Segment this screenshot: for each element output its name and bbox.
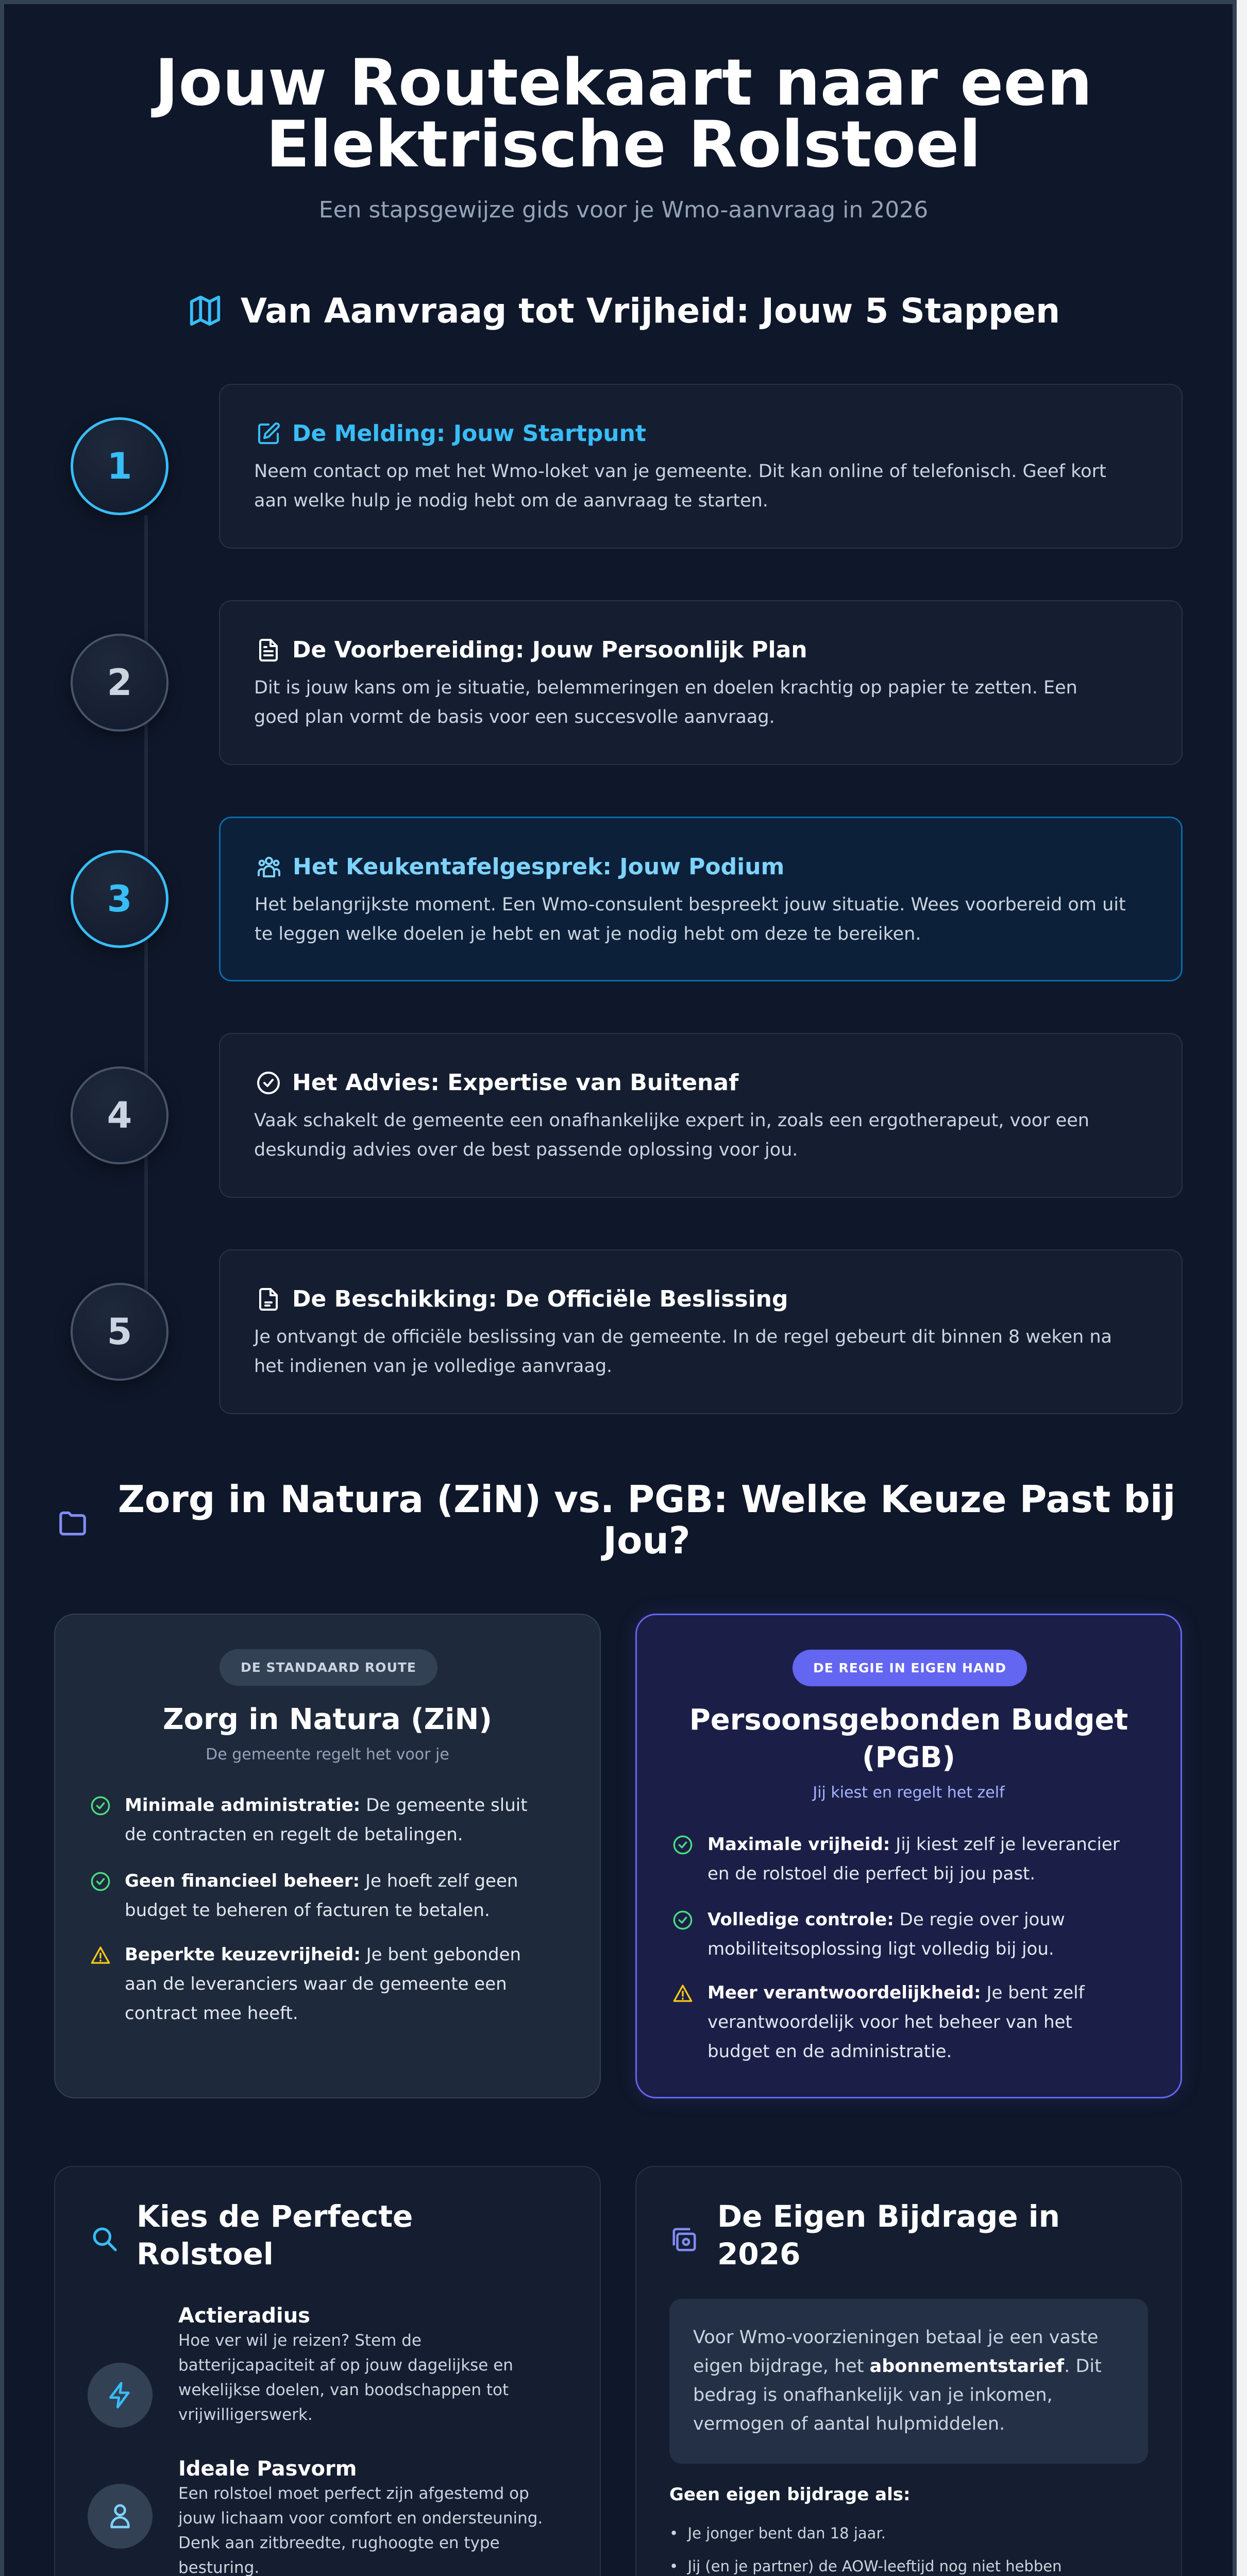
step 5 text: Je ontvangt de officiële beslissing van de gemeente. In de regel gebeurt dit binnen 8 weken na — [254, 1327, 1112, 1347]
panel: ZiN: de contracten en regelt de betalingen. — [125, 1824, 463, 1845]
panel: PGB — [635, 1614, 1182, 2098]
pill: standaard route — [220, 1649, 437, 1686]
title — [151, 46, 1092, 182]
ZiN title: Zorg in Natura (ZiN) — [163, 1703, 492, 1736]
feature: pasvorm — [88, 2457, 543, 2576]
pill: regie in eigen hand: DE REGIE IN EIGEN HAND — [813, 1660, 1006, 1675]
heading: 5 stappen: Van Aanvraag tot Vrijheid: Jouw 5 Stappen — [241, 291, 1060, 331]
step 4 text: deskundig advies over de best passende oplossing voor jou. — [254, 1140, 798, 1160]
panel: ZiN: Geen financieel beheer: Je hoeft zelf geen — [125, 1871, 518, 1891]
step 4 circle — [71, 1066, 168, 1164]
info box: bedrag is onafhankelijk van je inkomen, — [693, 2385, 1053, 2405]
list: conditions: • Je jonger bent dan 18 jaar. — [669, 2524, 886, 2542]
step 4 circle: 4 — [107, 1094, 132, 1137]
heading: eigen bijdrage — [717, 2199, 1060, 2272]
step 4 card — [219, 1033, 1183, 1198]
step 1 text: aan welke hulp je nodig hebt om de aanvraag te starten. — [254, 490, 768, 511]
feature: pasvorm: Ideale Pasvorm — [178, 2457, 357, 2481]
panel: PGB: en de rolstoel die perfect bij jou past. — [707, 1863, 1035, 1884]
PGB title — [689, 1703, 1128, 1774]
list: conditions — [669, 2524, 1061, 2575]
panel: ZiN: aan de leveranciers waar de gemeente een — [125, 1974, 507, 1994]
title: Elektrische Rolstoel — [266, 108, 981, 182]
step 2 text — [254, 677, 1077, 727]
ZiN subtitle: De gemeente regelt het voor je — [206, 1745, 449, 1764]
step 2 card — [219, 600, 1183, 765]
PGB bullet 3 — [673, 1982, 1085, 2062]
icon: folder — [59, 1512, 86, 1535]
feature: actieradius: wekelijkse doelen, van boodschappen tot — [178, 2381, 509, 2399]
step 2 title: De Voorbereiding: Jouw Persoonlijk Plan — [292, 637, 807, 663]
step 3 card — [219, 817, 1183, 981]
panel: PGB: verantwoordelijk voor het beheer van het — [707, 2012, 1072, 2032]
feature: actieradius — [88, 2304, 513, 2428]
feature: actieradius: Hoe ver wil je reizen? Stem de — [178, 2331, 422, 2350]
PGB subtitle: Jij kiest en regelt het zelf — [813, 1784, 1005, 1802]
heading: eigen bijdrage: 2026 — [717, 2236, 800, 2272]
ZiN bullet 2 — [91, 1871, 518, 1921]
pill: standaard route: DE STANDAARD ROUTE — [241, 1660, 416, 1675]
panel: ZiN — [54, 1614, 601, 2098]
feature: actieradius: Actieradius — [178, 2304, 310, 2328]
panel: PGB: Maximale vrijheid: Jij kiest zelf je leverancier — [707, 1834, 1120, 1855]
subheading: geen eigen bijdrage: Geen eigen bijdrage als: — [669, 2484, 911, 2505]
step 3 text — [255, 894, 1126, 944]
step 5 title: De Beschikking: De Officiële Beslissing — [292, 1286, 788, 1312]
panel: PGB: Volledige controle: De regie over jouw — [707, 1909, 1065, 1930]
step 5 text — [253, 1327, 1112, 1377]
feature: pasvorm: Denk aan zitbreedte, rughoogte en type — [178, 2534, 500, 2552]
title: Jouw Routekaart naar een — [155, 46, 1092, 120]
step 1 text — [254, 461, 1106, 511]
subtitle: Een stapsgewijze gids voor je Wmo-aanvraag in 2026 — [319, 197, 928, 223]
icon: wallet — [673, 2228, 696, 2251]
step 5 text: het indienen van je volledige aanvraag. — [254, 1356, 612, 1377]
PGB bullet 2 — [673, 1909, 1065, 1959]
PGB title: Persoonsgebonden Budget — [689, 1703, 1128, 1737]
info box: Voor Wmo-voorzieningen betaal je een vaste — [693, 2327, 1098, 2348]
icon: search — [93, 2228, 116, 2251]
feature: pasvorm: Een rolstoel moet perfect zijn afgestemd op — [178, 2484, 529, 2503]
step 2 circle: 2 — [107, 662, 132, 704]
panel: PGB: budget en de administratie. — [707, 2041, 952, 2062]
step 3 title: Het Keukentafelgesprek: Jouw Podium — [293, 854, 784, 880]
panel: PGB: Meer verantwoordelijkheid: Je bent zelf — [707, 1982, 1085, 2003]
heading: kies rolstoel: Rolstoel — [137, 2236, 274, 2272]
PGB bullet 1 — [673, 1834, 1120, 1884]
info box: eigen bijdrage, het abonnementstarief. Dit — [693, 2356, 1102, 2377]
step 3 text: te leggen welke doelen je hebt en wat je nodig hebt om deze te bereiken. — [255, 924, 921, 944]
panel: PGB: mobiliteitsoplossing ligt volledig bij jou. — [707, 1939, 1054, 1959]
step 5 circle: 5 — [107, 1311, 132, 1353]
info box: vermogen of aantal hulpmiddelen. — [693, 2414, 1005, 2434]
list: conditions: • Jij (en je partner) de AOW-leeftijd nog niet hebben — [669, 2557, 1061, 2575]
panel: ZiN: budget te beheren of facturen te betalen. — [125, 1900, 490, 1921]
icon: person — [88, 2484, 153, 2549]
panel: kies rolstoel — [54, 2166, 601, 2576]
PGB title: (PGB) — [862, 1741, 955, 1774]
feature: actieradius: batterijcapaciteit af op jouw dagelijkse en — [178, 2356, 513, 2375]
heading: kies rolstoel — [137, 2199, 413, 2272]
heading: ZiN vs PGB — [118, 1478, 1175, 1562]
icon: map — [190, 296, 221, 326]
step 2 text: goed plan vormt de basis voor een succesvolle aanvraag. — [254, 707, 775, 727]
timeline line — [144, 515, 148, 1334]
step 1 card — [219, 384, 1183, 549]
icon: lightning — [88, 2363, 153, 2428]
step 4 title: Het Advies: Expertise van Buitenaf — [292, 1070, 738, 1096]
step 4 text: Vaak schakelt de gemeente een onafhankelijke expert in, zoals een ergotherapeut, voor een — [254, 1110, 1089, 1131]
step 4 text — [254, 1110, 1089, 1160]
step 1 circle: 1 — [107, 445, 132, 487]
panel: eigen bijdrage — [635, 2166, 1182, 2576]
heading: eigen bijdrage: De Eigen Bijdrage in — [717, 2199, 1060, 2234]
ZiN bullet 3 — [91, 1944, 521, 2024]
step 3 circle: 3 — [107, 878, 132, 920]
feature: pasvorm: jouw lichaam voor comfort en ondersteuning. — [178, 2509, 543, 2528]
step 5 card — [219, 1249, 1183, 1414]
step 3 text: Het belangrijkste moment. Een Wmo-consulent bespreekt jouw situatie. Wees voorbereid om uit — [255, 894, 1126, 915]
feature: actieradius: vrijwilligerswerk. — [178, 2405, 313, 2424]
panel: ZiN: Minimale administratie: De gemeente sluit — [125, 1795, 528, 1816]
ZiN bullet 1 — [91, 1795, 528, 1845]
pill: regie in eigen hand — [793, 1650, 1027, 1686]
step 1 text: Neem contact op met het Wmo-loket van je gemeente. Dit kan online of telefonisch. Geef kort — [254, 461, 1106, 482]
step 1 circle — [71, 417, 168, 515]
heading: ZiN vs PGB: Jou? — [603, 1519, 690, 1562]
step 3 circle — [71, 850, 168, 948]
step 2 circle — [71, 634, 168, 732]
heading: ZiN vs PGB: Zorg in Natura (ZiN) vs. PGB: Welke Keuze Past bij — [118, 1478, 1175, 1521]
step 5 circle — [71, 1283, 168, 1381]
panel: ZiN: Beperkte keuzevrijheid: Je bent gebonden — [125, 1944, 521, 1965]
info box — [669, 2299, 1148, 2464]
step 2 text: Dit is jouw kans om je situatie, belemmeringen en doelen krachtig op papier te zetten. Een — [254, 677, 1077, 698]
panel: ZiN: contract mee heeft. — [125, 2003, 298, 2024]
step 1 title: De Melding: Jouw Startpunt — [292, 420, 646, 447]
heading: kies rolstoel: Kies de Perfecte — [137, 2199, 413, 2234]
